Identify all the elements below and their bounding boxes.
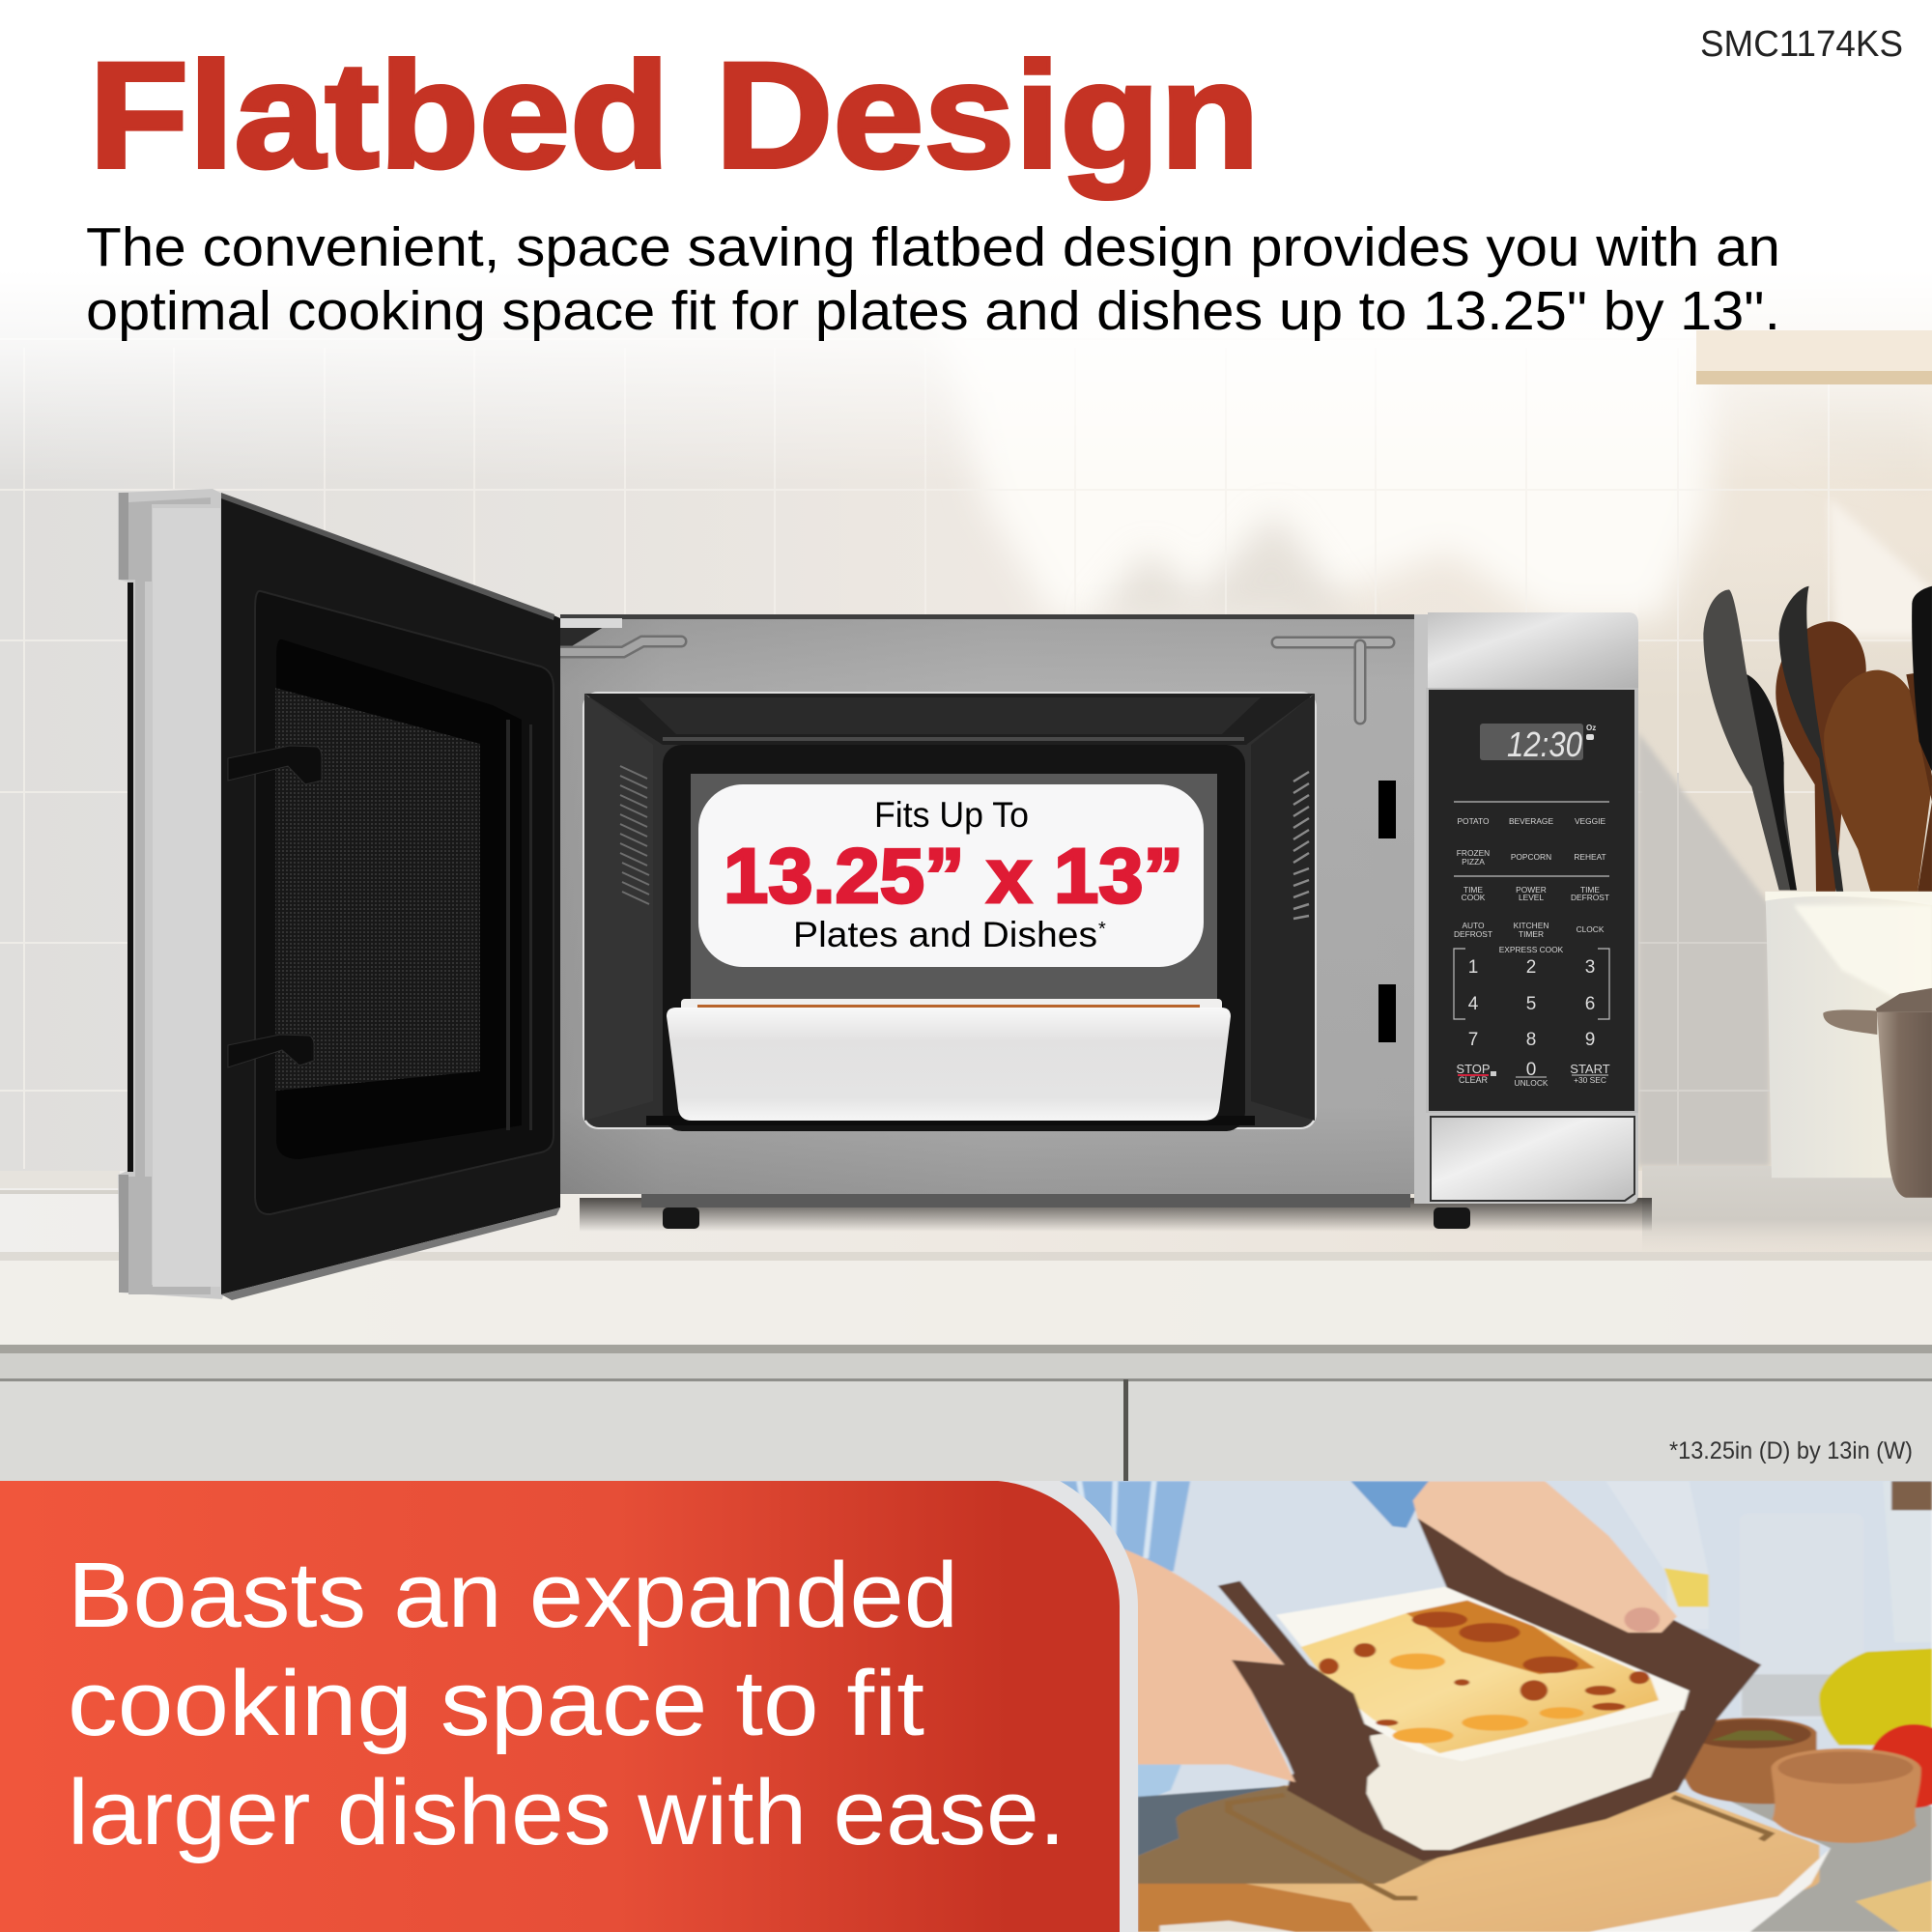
towel bbox=[1287, 1519, 1761, 1861]
keypad labels bbox=[1454, 816, 1609, 1088]
model number: SMC1174KS bbox=[1700, 24, 1903, 65]
cup bbox=[1765, 892, 1932, 1178]
panel border bbox=[0, 1481, 1138, 1932]
dish in microwave bbox=[667, 999, 1231, 1121]
microwave shadow bbox=[580, 1198, 1652, 1232]
door black face bbox=[221, 496, 560, 1294]
keypad labels: AUTO bbox=[1462, 921, 1485, 930]
size callout bbox=[698, 784, 1204, 967]
shirt bbox=[1061, 1481, 1430, 1798]
wooden spoons bbox=[1776, 621, 1932, 893]
keypad digits: 1 bbox=[1468, 957, 1478, 978]
keypad digits: 5 bbox=[1526, 994, 1536, 1014]
pot bbox=[1823, 988, 1932, 1198]
keypad labels: VEGGIE bbox=[1575, 816, 1605, 826]
tomato bbox=[1868, 1724, 1932, 1808]
keypad digits: 4 bbox=[1468, 994, 1479, 1014]
keypad digits: 7 bbox=[1468, 1030, 1478, 1050]
open door bbox=[118, 489, 560, 1300]
door slots bbox=[1378, 781, 1396, 1042]
embossed hooks bbox=[560, 641, 1389, 719]
keypad digits: 9 bbox=[1585, 1030, 1595, 1050]
black spoons bbox=[1703, 586, 1932, 893]
keypad labels: POWER bbox=[1516, 885, 1547, 895]
panel text: Boasts an expanded bbox=[68, 1544, 958, 1647]
size callout: Fits Up To bbox=[874, 795, 1029, 835]
keypad digits: STOP bbox=[1456, 1062, 1491, 1076]
keypad labels: DEFROST bbox=[1571, 893, 1609, 902]
keypad labels: PIZZA bbox=[1462, 857, 1485, 867]
vents bbox=[620, 766, 649, 904]
description: The convenient, space saving flatbed design provides you with an bbox=[86, 216, 1780, 278]
control panel bbox=[1414, 612, 1638, 1204]
black panel bbox=[1429, 690, 1634, 1111]
keypad labels: CLOCK bbox=[1577, 924, 1605, 934]
keypad labels: TIME bbox=[1463, 885, 1483, 895]
keypad digits: 8 bbox=[1526, 1030, 1536, 1050]
size callout: * bbox=[1098, 919, 1106, 940]
description: optimal cooking space fit for plates and dishes up to 13.25" by 13". bbox=[86, 280, 1780, 342]
cabinet front bbox=[0, 1345, 1932, 1481]
display: 12:30 bbox=[1507, 724, 1582, 764]
panel text: larger dishes with ease. bbox=[68, 1761, 1065, 1864]
countertop bbox=[0, 1166, 1932, 1345]
keypad labels: POTATO bbox=[1457, 816, 1490, 826]
display: Oz bbox=[1586, 724, 1596, 732]
keypad digits: 0 bbox=[1526, 1060, 1536, 1080]
dish body bbox=[1364, 1710, 1683, 1851]
keypad labels: TIMER bbox=[1519, 929, 1544, 939]
keypad labels: KITCHEN bbox=[1514, 921, 1548, 930]
kitchen background bbox=[0, 330, 1932, 1481]
microwave feet bbox=[663, 1208, 1470, 1229]
panel text: cooking space to fit bbox=[68, 1652, 924, 1755]
bottom callout panel bbox=[0, 1481, 1138, 1932]
glassware bbox=[1663, 1481, 1932, 1717]
utensil holder bbox=[1703, 586, 1932, 1198]
keypad labels: BEVERAGE bbox=[1509, 816, 1553, 826]
oil bottle bbox=[1819, 1649, 1932, 1746]
size callout: 13.25” x 13” bbox=[724, 833, 1183, 919]
door mesh window bbox=[275, 688, 480, 1091]
footnote: *13.25in (D) by 13in (W) bbox=[1669, 1437, 1913, 1464]
size callout: Plates and Dishes bbox=[793, 915, 1097, 954]
cutting board bbox=[1246, 1785, 1821, 1932]
keypad labels: DEFROST bbox=[1454, 929, 1492, 939]
door inner frame bbox=[255, 591, 554, 1214]
microwave bbox=[554, 614, 1470, 1229]
keypad digits bbox=[1456, 957, 1610, 1080]
photo: lasagna dish bbox=[1060, 1481, 1932, 1932]
panel text bbox=[68, 1544, 1065, 1864]
keypad labels: LEVEL bbox=[1519, 893, 1544, 902]
keypad digits: 2 bbox=[1526, 957, 1536, 978]
bottom metal handle bbox=[1426, 1113, 1638, 1204]
keypad labels: CLEAR bbox=[1459, 1075, 1489, 1085]
left hand bbox=[1118, 1548, 1295, 1782]
keypad labels: UNLOCK bbox=[1515, 1078, 1548, 1088]
microwave body bbox=[560, 618, 1430, 1194]
keypad labels: EXPRESS COOK bbox=[1499, 945, 1564, 954]
shelf bbox=[1696, 330, 1932, 384]
right hand bbox=[1413, 1481, 1677, 1633]
door latches bbox=[228, 746, 322, 1067]
keypad digits: 6 bbox=[1585, 994, 1595, 1014]
heading: Flatbed Design bbox=[89, 32, 1260, 200]
panel fill bbox=[0, 1481, 1120, 1932]
keypad labels: +30 SEC bbox=[1574, 1075, 1606, 1085]
keypad labels: FROZEN bbox=[1457, 848, 1490, 858]
table bbox=[1683, 1777, 1932, 1932]
side trim bbox=[1414, 614, 1434, 1204]
keypad digits: 3 bbox=[1585, 957, 1595, 978]
keypad labels: POPCORN bbox=[1511, 852, 1551, 862]
lasagna bbox=[1301, 1601, 1659, 1753]
keypad labels: COOK bbox=[1462, 893, 1486, 902]
keypad labels: REHEAT bbox=[1574, 852, 1606, 862]
door silver edge bbox=[118, 489, 224, 1299]
wall shadow by microwave bbox=[1638, 732, 1770, 1166]
wooden bowls bbox=[1682, 1718, 1921, 1843]
description bbox=[86, 216, 1780, 342]
left towel fold bbox=[1218, 1581, 1379, 1782]
cavity bbox=[582, 692, 1317, 1131]
keypad digits: START bbox=[1570, 1062, 1610, 1076]
wall sunlight wedge bbox=[1829, 497, 1932, 638]
top metal cap bbox=[1428, 612, 1638, 688]
keypad labels: TIME bbox=[1580, 885, 1600, 895]
dish rim bbox=[1276, 1587, 1690, 1761]
